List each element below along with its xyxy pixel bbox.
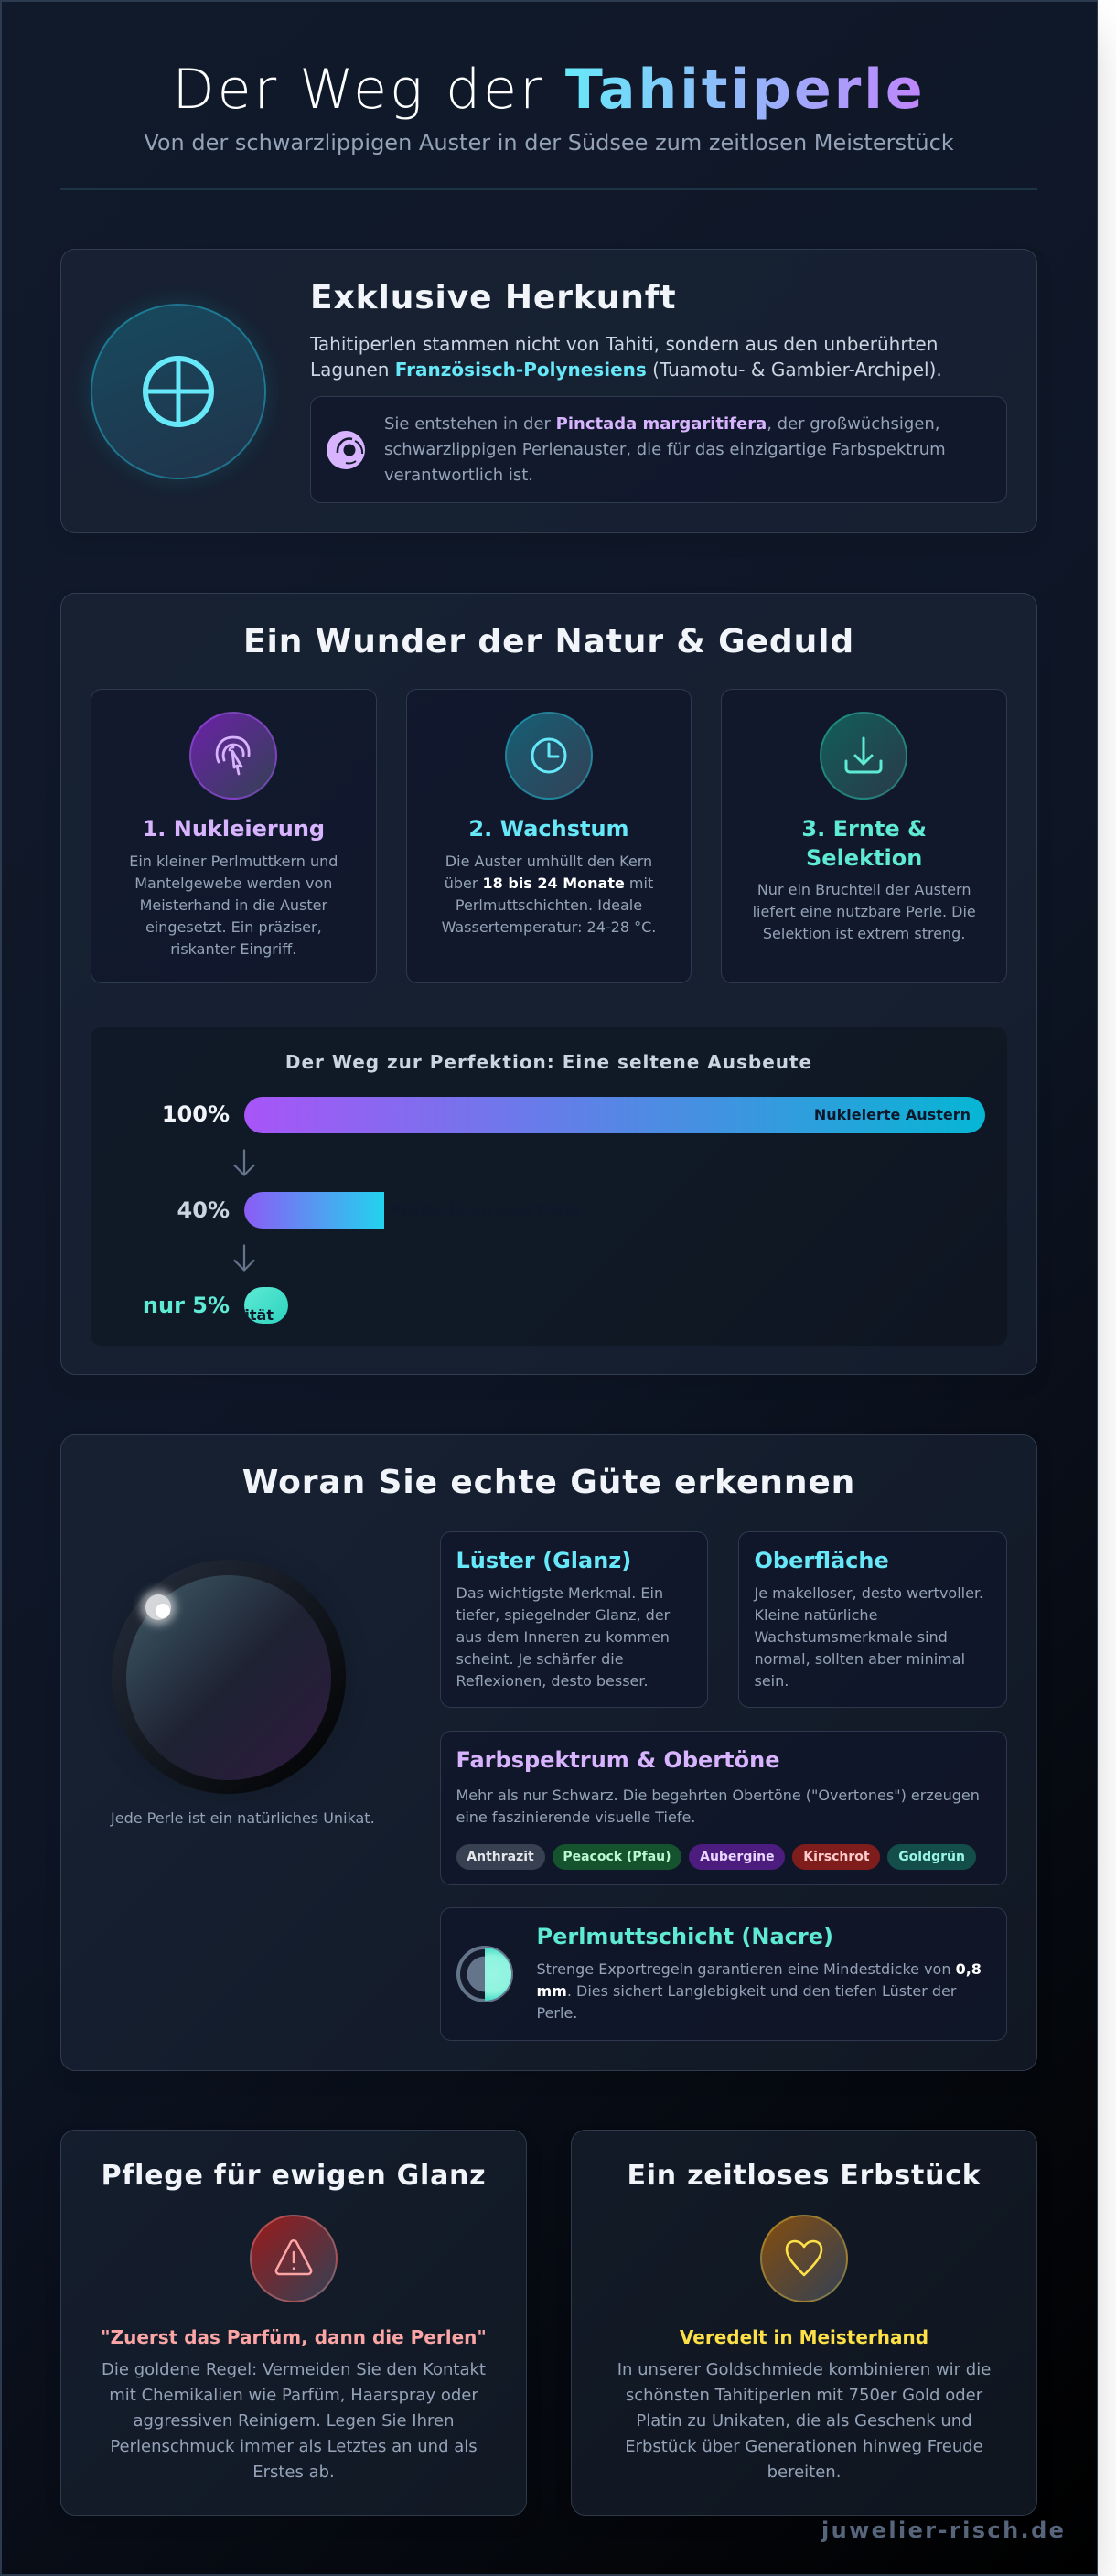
- bar: top quality: [244, 1287, 288, 1324]
- step text: Meisterhand in die Auster: [140, 896, 327, 914]
- icon: heart: [760, 2215, 848, 2302]
- care text: Erstes ab.: [252, 2463, 335, 2482]
- panel: Erbstück: [571, 2130, 1037, 2516]
- icon: warning: [250, 2215, 338, 2302]
- card text: Kleine natürliche: [754, 1606, 877, 1623]
- title: Der Weg der Tahitiperle: [172, 57, 926, 121]
- step title: [801, 816, 927, 871]
- card text: [456, 1787, 980, 1826]
- colour pills: Anthrazit: [467, 1850, 534, 1864]
- step text: liefert eine nutzbare Perle. Die: [753, 903, 976, 920]
- card text: Perle.: [536, 2004, 577, 2022]
- card text: [536, 1960, 982, 2022]
- step text: Die Auster umhüllt den Kern: [445, 853, 652, 870]
- heirloom text: schönsten Tahitiperlen mit 750er Gold oder: [626, 2386, 982, 2405]
- icon: clock: [505, 712, 593, 800]
- icon: fingerprint cursor: [189, 712, 277, 800]
- heirloom text: bereiten.: [767, 2463, 841, 2482]
- card: Lüster: [440, 1531, 708, 1707]
- heading: Pflege für ewigen Glanz: [102, 2160, 486, 2192]
- card: Oberfläche: [738, 1531, 1007, 1707]
- card text: Das wichtigste Merkmal. Ein: [456, 1584, 663, 1601]
- card title: Lüster (Glanz): [456, 1548, 631, 1573]
- card title: Perlmuttschicht (Nacre): [536, 1924, 833, 1949]
- subtitle: Von der schwarzlippigen Auster in der Südsee zum zeitlosen Meisterstück: [144, 130, 954, 156]
- bar label outside bar: Produzieren eine Perle: [392, 1201, 580, 1218]
- heirloom text: Erbstück über Generationen hinweg Freude: [625, 2437, 983, 2456]
- icon: oyster: [327, 431, 365, 469]
- value: nur 5%: nur 5%: [143, 1292, 230, 1317]
- step text: [753, 881, 976, 942]
- step text: riskanter Eingriff.: [170, 940, 296, 958]
- pearl highlight glow: [145, 1594, 171, 1620]
- icon: download tray: [820, 712, 907, 800]
- watermark: juwelier-risch.de: [821, 2517, 1066, 2543]
- panel: Woran Sie echte Güte erkennen: [60, 1434, 1037, 2071]
- colour pills: Aubergine: [700, 1850, 775, 1864]
- subheading: Veredelt in Meisterhand: [680, 2326, 928, 2348]
- heading: Ein zeitloses Erbstück: [628, 2160, 981, 2192]
- colour pills: Kirschrot: [803, 1850, 870, 1864]
- card: 3. Ernte & Selektion: [721, 689, 1007, 983]
- panel: Exklusive Herkunft: [60, 249, 1037, 533]
- pearl caption: Jede Perle ist ein natürliches Unikat.: [111, 1809, 375, 1827]
- bar: Nukleierte Austern: Nukleierte Austern: [814, 1106, 971, 1123]
- card text: sein.: [754, 1672, 789, 1689]
- callout text: schwarzlippigen Perlenauster, die für das einzigartige Farbspektrum: [384, 440, 946, 459]
- callout text: Sie entstehen in der Pinctada margaritifera, der großwüchsigen,: [384, 414, 940, 434]
- heirloom text: [617, 2360, 991, 2482]
- card text: mm. Dies sichert Langlebigkeit und den tiefen Lüster der: [536, 1982, 956, 2000]
- step title: 1. Nukleierung: [143, 816, 325, 842]
- card text: [754, 1584, 983, 1689]
- card text: tiefer, spiegelnder Glanz, der: [456, 1606, 670, 1623]
- step text: [129, 853, 338, 958]
- step title: 3. Ernte &: [801, 816, 927, 842]
- card text: Strenge Exportregeln garantieren eine Mindestdicke von 0,8: [536, 1960, 982, 1978]
- step text: über 18 bis 24 Monate mit: [445, 875, 653, 892]
- step text: eingesetzt. Ein präziser,: [145, 918, 322, 936]
- arrow: [233, 1149, 255, 1176]
- card text: [456, 1584, 670, 1689]
- callout text: verantwortlich ist.: [384, 466, 533, 485]
- care text: mit Chemikalien wie Parfüm, Haarspray oder: [109, 2386, 478, 2405]
- heading: Ein Wunder der Natur & Geduld: [243, 622, 854, 660]
- panel: Ein Wunder der Natur & Geduld: [60, 593, 1037, 1375]
- pearl body: [126, 1575, 331, 1780]
- card text: scheint. Je schärfer die: [456, 1650, 624, 1667]
- pearl highlight dot: [156, 1604, 170, 1618]
- card text: eine faszinierende visuelle Tiefe.: [456, 1809, 695, 1826]
- callout: Pinctada margaritifera: [310, 396, 1007, 503]
- step text: Nur ein Bruchteil der Austern: [757, 881, 971, 898]
- card text: Je makelloser, desto wertvoller.: [754, 1584, 983, 1601]
- card title: Oberfläche: [754, 1548, 889, 1573]
- intro text: [309, 333, 942, 381]
- colour pills: Goldgrün: [898, 1850, 965, 1864]
- intro text: Tahitiperlen stammen nicht von Tahiti, sondern aus den unberührten: [310, 333, 938, 355]
- card text: normal, sollten aber minimal: [754, 1650, 965, 1667]
- card text: Mehr als nur Schwarz. Die begehrten Obertöne ("Overtones") erzeugen: [456, 1787, 980, 1804]
- heirloom text: In unserer Goldschmiede kombinieren wir die: [617, 2360, 991, 2379]
- card: Farbspektrum: [440, 1731, 1007, 1884]
- step text: [442, 853, 656, 936]
- value: 100%: 100%: [162, 1101, 230, 1127]
- icon: nacre cross-section: [456, 1946, 513, 2002]
- quote: "Zuerst das Parfüm, dann die Perlen": [101, 2326, 487, 2348]
- bar: 40 percent: [244, 1192, 384, 1229]
- care text: Perlenschmuck immer als Letztes an und als: [110, 2437, 478, 2456]
- care text: Die goldene Regel: Vermeiden Sie den Kontakt: [102, 2360, 486, 2379]
- heirloom text: Platin zu Unikaten, die als Geschenk und: [636, 2411, 972, 2431]
- bar: Nukleierte Austern: [244, 1097, 985, 1133]
- card text: Wachstumsmerkmale sind: [754, 1628, 948, 1645]
- icon: globe: [91, 304, 266, 479]
- illustration: pearl: [112, 1560, 346, 1794]
- card title: Farbspektrum & Obertöne: [456, 1747, 779, 1773]
- step text: Wassertemperatur: 24-28 °C.: [442, 918, 656, 936]
- care text: [102, 2360, 486, 2482]
- value: 40%: 40%: [177, 1197, 230, 1222]
- step text: Perlmuttschichten. Ideale: [456, 896, 642, 914]
- heading: Exklusive Herkunft: [310, 279, 676, 317]
- card: Perlmuttschicht: [440, 1907, 1007, 2041]
- arrow: [233, 1244, 255, 1272]
- card text: Reflexionen, desto besser.: [456, 1672, 649, 1689]
- card: 1. Nukleierung: [91, 689, 377, 983]
- intro text: Lagunen Französisch-Polynesiens (Tuamotu- & Gambier-Archipel).: [310, 359, 942, 381]
- step text: Mantelgewebe werden von: [134, 875, 332, 892]
- colour pills: [456, 1844, 976, 1870]
- care text: aggressiven Reinigern. Legen Sie Ihren: [133, 2411, 455, 2431]
- chart: yield funnel: [91, 1027, 1007, 1346]
- step text: Selektion ist extrem streng.: [763, 925, 965, 942]
- callout text: [384, 414, 946, 485]
- step text: Ein kleiner Perlmuttkern und: [129, 853, 338, 870]
- step title: Selektion: [806, 845, 922, 871]
- heading: Woran Sie echte Güte erkennen: [242, 1464, 855, 1500]
- card text: aus dem Inneren zu kommen: [456, 1628, 670, 1645]
- panel: Pflege: [60, 2130, 527, 2516]
- card: 2. Wachstum: [406, 689, 692, 983]
- colour pills: Peacock (Pfau): [563, 1850, 671, 1864]
- chart title: Der Weg zur Perfektion: Eine seltene Ausbeute: [285, 1050, 812, 1072]
- step title: 2. Wachstum: [468, 816, 629, 842]
